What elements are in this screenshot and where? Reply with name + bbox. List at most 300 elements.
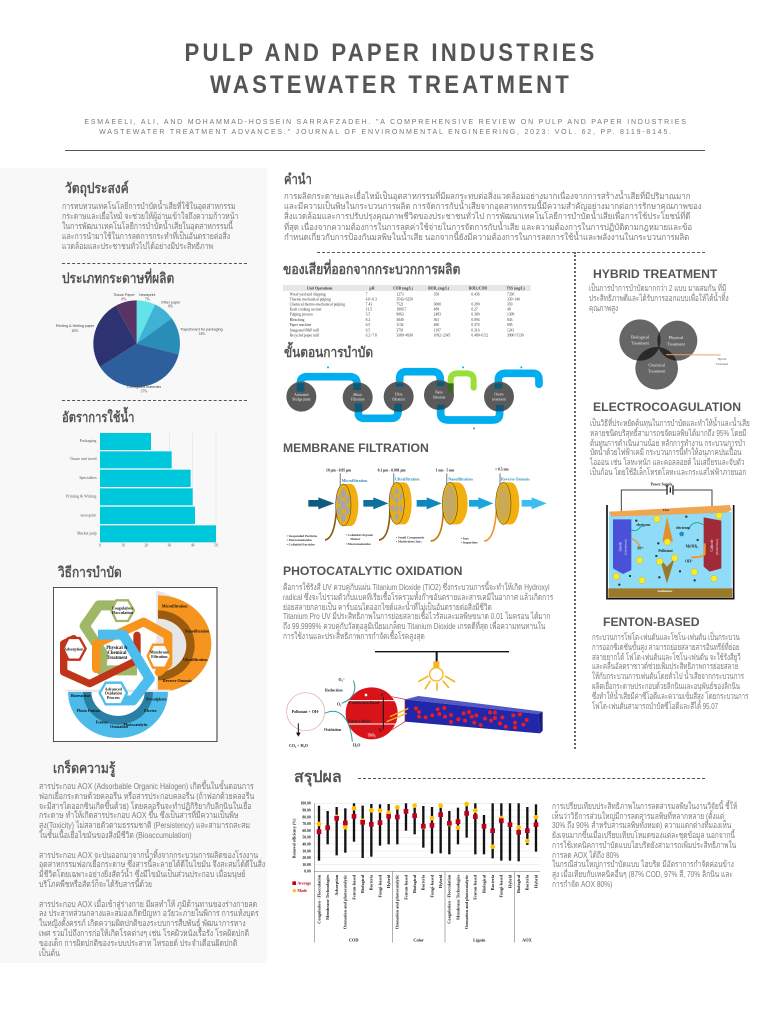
bar chart: water use: 30 bbox=[168, 543, 171, 547]
chart: removal efficiency: Bacteria bbox=[421, 874, 426, 890]
text: introduction: ที่สุด เนื่องจากความต้องการในการลดค่าใช้จ่ายในการจัดการกับน้ำเสีย และความต้องการในการปฏิบัติตามกฎหมายและข้อ bbox=[284, 222, 692, 232]
diagram: membrane filtration: Matter bbox=[350, 537, 361, 541]
table: unit operations: 1309 bbox=[507, 313, 515, 317]
table: unit operations: 350 bbox=[434, 292, 440, 296]
table: unit operations: 7 bbox=[366, 292, 368, 296]
diagram: membrane filtration: • Colloidal Particles bbox=[287, 543, 316, 547]
table: unit operations: 0.480~0.52 bbox=[472, 333, 488, 337]
bar chart: water use: 10 bbox=[121, 543, 125, 547]
venn diagram: hybrid treatment: Treatment bbox=[648, 369, 666, 374]
text: conclusion: ยังเจนมากขึ้นเมื่อเปรียบเทียบโหมดของแต่ละชุดข้อมูล นอกจากนี้ bbox=[552, 830, 735, 840]
chart: removal efficiency: Fungi-based bbox=[429, 874, 434, 898]
diagram: photocatalysis: O₂⁻ bbox=[338, 677, 345, 682]
text: photocatalytic oxidation: Titanium Pro UV มีประสิทธิภาพในการย่อยสลายเชื้อไวรัสและมลพิษขนาด 0.01 ไมครอน ได้มาก bbox=[283, 611, 550, 621]
table: unit operations: 9063 bbox=[397, 313, 404, 317]
text: conclusion: การกำจัด AOX 80%) bbox=[552, 879, 612, 889]
table: unit operations: Chemical thermo-mechanical pulping bbox=[290, 302, 345, 306]
text: AOX facts: กระดาษ ทำให้เกิดสารประกอบ AOX ขึ้น ซึ่งเป็นสารที่มีความเป็นพิษ bbox=[39, 810, 238, 820]
pie chart: paper types: Other paper bbox=[161, 300, 181, 304]
diagram: physical and chemical treatment bbox=[53, 587, 218, 742]
diagram: electrocoagulation cell: M(OH)₃ bbox=[686, 545, 700, 549]
chart: removal efficiency: COD bbox=[349, 938, 358, 943]
diagram: photocatalysis: Conduction Band bbox=[349, 700, 380, 705]
heading: electrocoagulation: ELECTROCOAGULATION bbox=[593, 400, 741, 414]
diagram: electrocoagulation cell: OH⁻ bbox=[686, 560, 693, 564]
chart: removal efficiency: Ozonation and photocatalytic bbox=[343, 875, 348, 929]
text: AOX facts: บริโภคพืชหรือสัตว์ก็จะได้รับสารนี้ด้วย bbox=[39, 879, 152, 889]
text: photocatalytic oxidation: การใช้งานและประสิทธิภาพการกำจัดเชื้อโรคสูงสุด bbox=[283, 631, 425, 641]
heading: objective: วัตถุประสงค์ bbox=[65, 180, 129, 196]
bar chart: water use: Printing & Writing bbox=[66, 493, 96, 498]
text: hybrid treatment: เป็นการบำการบำบัดมากกว่า 2 แบบ มาผสมกัน ที่มี bbox=[589, 283, 726, 293]
text: electrocoagulation: บัดน้ำด้วยไฟฟ้าเคมี กระบวนการนี้ทำให้อนุภาคปนเปื้อน bbox=[590, 447, 742, 457]
flow diagram: treatment steps: Ozone bbox=[495, 393, 504, 397]
diagram: physical and chemical treatment: Persulphate bbox=[146, 696, 167, 701]
bar chart: water use: 40 bbox=[191, 543, 195, 547]
table: unit operations: 3380~4930 bbox=[397, 333, 413, 337]
text: AOX facts: มีชีวิตโดยเฉพาะอย่างยิ่งสัตว์น้ำ ซึ่งมีไขมันเป็นส่วนประกอบ เมื่อมนุษย์ bbox=[39, 869, 245, 879]
diagram: physical and chemical treatment: Physical & bbox=[106, 646, 128, 651]
text: fenton-based: ให้กับกระบวนการเฟนตันโดยทั่วไป น้ำเสียจากกระบวนการ bbox=[592, 671, 744, 681]
chart: removal efficiency: Hybrid bbox=[507, 874, 512, 888]
chart: removal efficiency: Coagulation - Flocculation bbox=[447, 874, 452, 924]
chart: removal efficiency: Biological bbox=[516, 874, 521, 893]
diagram: membrane filtration: • Small Compounds bbox=[396, 535, 425, 539]
chart: removal efficiency: 10.00 bbox=[302, 863, 311, 867]
diagram: physical and chemical treatment: Coagulation bbox=[112, 605, 134, 610]
diagram: photocatalysis bbox=[286, 651, 543, 748]
text: AOX facts bbox=[39, 780, 265, 958]
table: unit operations: 2483 bbox=[434, 313, 441, 317]
chart: removal efficiency: Coagulation - Flocculation bbox=[316, 874, 321, 924]
diagram: membrane filtration: Reverse Osmosis bbox=[501, 476, 530, 481]
diagram: physical and chemical treatment: Bioreaction bbox=[71, 693, 91, 698]
text: electrocoagulation: เป็นวิธีที่ประหยัดต้นทุนในการบำบัดและทำให้น้ำและน้ำเสีย bbox=[590, 418, 750, 428]
flow diagram: treatment steps bbox=[286, 366, 543, 430]
citation: ESMAEELI, ALI, AND MOHAMMAD-HOSSEIN SARRAFZADEH. "A COMPREHENSIVE REVIEW ON PULP AND PAPER INDUSTRIES bbox=[84, 119, 688, 126]
table: unit operations: pH bbox=[370, 286, 375, 290]
vertical divider bbox=[574, 252, 576, 749]
table: unit operations: 7330 bbox=[507, 292, 515, 296]
diagram: physical and chemical treatment: Electro bbox=[144, 708, 156, 713]
chart: removal efficiency: Fenton-based bbox=[403, 874, 408, 900]
text: fenton-based: กระบวนการโฟโต-เฟนตันและโซโน-เฟนตัน เป็นกระบวน bbox=[592, 632, 740, 642]
pie chart: paper types: Corrugated materials bbox=[127, 385, 161, 389]
bar chart: water use: Specialties bbox=[79, 475, 97, 480]
table: unit operations: Recycled paper mill bbox=[290, 333, 319, 337]
chart: removal efficiency: Bacteria bbox=[490, 874, 495, 890]
table: unit operations: Pulping process bbox=[290, 313, 314, 317]
table: unit operations: 361 bbox=[434, 318, 440, 322]
table: unit operations: Wood yard and chipping bbox=[290, 292, 326, 296]
text: fenton-based: การออกซิเดชันขั้นสูง สามารถย่อยสลายสารอินทรีย์ที่ย่อย bbox=[592, 642, 739, 652]
chart: removal efficiency: 20.00 bbox=[302, 856, 311, 860]
table: unit operations: 1273 bbox=[397, 292, 404, 296]
diagram: electrocoagulation cell: Pollutant bbox=[659, 549, 674, 553]
diagram: physical and chemical treatment: Treatment bbox=[107, 656, 128, 661]
text: fenton-based: และคลื่นอัลตราซาวด์ช่วยเพิ่มประสิทธิภาพการย่อยสลาย bbox=[592, 661, 738, 671]
diagram: electrocoagulation cell: Floc bbox=[663, 508, 670, 512]
chart: removal efficiency: Ozonation and photocatalytic bbox=[464, 875, 469, 929]
chart: removal efficiency: AOX bbox=[522, 938, 533, 943]
diagram: physical and chemical treatment: Filtration bbox=[151, 654, 168, 659]
diagram: photocatalysis: e⁻ bbox=[381, 693, 386, 698]
text: AOX facts: เป็นต้น bbox=[39, 948, 60, 958]
chart: removal efficiency: 0.00 bbox=[304, 870, 311, 874]
text: AOX facts: ลง ประสาทส่วนกลางและสมองเกิดปัญหา อวัยวะภายในพิการ การแท้งบุตร bbox=[39, 908, 259, 918]
text: AOX facts: สารประกอบ AOX (Adsorbable Organic Halogen) เกิดขึ้นในขั้นตอนการ bbox=[39, 781, 254, 791]
table: unit operations bbox=[283, 285, 530, 338]
diagram: physical and chemical treatment: Microfiltration bbox=[162, 603, 188, 608]
table: unit operations: 0.094 bbox=[472, 318, 480, 322]
chart: removal efficiency: Removal efficiency (%) bbox=[291, 818, 296, 858]
text: AOX facts: สารประกอบ AOX จะปนออกมาจากน้ำทิ้งจากกระบวนการผลิตของโรงงาน bbox=[39, 850, 258, 860]
diagram: electrocoagulation cell bbox=[606, 482, 734, 600]
text: introduction: และมีความเป็นพิษในกระบวนการผลิต การจัดการกับน้ำเสียจากอุตสาหกรรมนี้มีความสำคัญอย่างมากต่อการรักษาคุณภาพของ bbox=[284, 201, 702, 211]
text: conclusion: เห็นว่าวิธีการส่วนใหญ่มีการลดสารมลพิษที่หลากหลาย (ตั้งแต่ bbox=[552, 811, 724, 821]
chart: removal efficiency: Hybrid bbox=[438, 874, 443, 888]
venn diagram: hybrid treatment: Biological bbox=[631, 334, 650, 339]
text: objective: การทบทวนเทคโนโลยีการบำบัดน้ำเสียที่ใช้ในอุตสาหกรรม bbox=[62, 201, 235, 211]
diagram: electrocoagulation cell: electrons bbox=[676, 526, 691, 530]
table: unit operations: 330~140 bbox=[507, 297, 520, 301]
diagram: membrane filtration: • Suspended Particles bbox=[287, 534, 318, 538]
chart: removal efficiency: Hybrid bbox=[533, 874, 538, 888]
table: unit operations: - bbox=[472, 297, 474, 301]
diagram: physical and chemical treatment: Ultrafiltration bbox=[183, 657, 208, 662]
table: unit operations: 6.5 bbox=[366, 323, 371, 327]
diagram: membrane filtration: Microfiltration bbox=[342, 478, 368, 483]
diagram: photocatalysis: H₂O bbox=[353, 743, 360, 748]
citation: WASTEWATER TREATMENT ADVANCES." JOURNAL OF ENVIRONMENTAL ENGINEERING, 2023: VOL. 62, PP. 8119-8145. bbox=[99, 129, 673, 136]
chart: removal efficiency: 50.00 bbox=[302, 836, 311, 840]
heading: water use: อัตราการใช้น้ำ bbox=[62, 409, 134, 425]
bar chart: water use: Packaging bbox=[80, 438, 96, 443]
diagram: membrane filtration: • Ions bbox=[461, 536, 469, 540]
venn diagram: hybrid treatment: Treatment bbox=[631, 341, 650, 346]
table: unit operations: 1197 bbox=[434, 328, 441, 332]
diagram: electrocoagulation cell: Power Supply bbox=[651, 482, 673, 486]
text: introduction: กำหนดเกี่ยวกับการป้องกันมลพิษในน้ำเสีย นอกจากนี้ยังมีความต้องการในการลดการใช้น้ำและพลังงานในกระบวนการผลิต bbox=[284, 232, 689, 242]
table: unit operations: 4.0~6.3 bbox=[366, 297, 377, 301]
diagram: electrocoagulation cell: electrons bbox=[637, 523, 651, 527]
diagram: electrocoagulation cell: Sediments bbox=[658, 589, 673, 593]
diagram: membrane filtration: < 0.5 nm bbox=[495, 468, 509, 472]
text: photocatalytic oxidation: คือการใช้รังสี UV ควบคู่กับแผ่น Titanium Dioxide (TiO2) ซึ่งกระบวนการนี้จะทำให้เกิด Hydroxyl bbox=[283, 582, 550, 592]
diagram: membrane filtration: 10 μm - 0.05 μm bbox=[326, 469, 351, 473]
heading: fenton-based: FENTON-BASED bbox=[603, 615, 700, 629]
text: electrocoagulation: หลายชนิดบริสุทธิ์สามารถขจัดมลพิษได้มากถึง 95% โดยมี bbox=[590, 428, 746, 438]
bar chart: water use: 20 bbox=[145, 543, 148, 547]
chart: removal efficiency: Biological bbox=[481, 874, 486, 893]
pie chart: paper types: 8% bbox=[122, 297, 126, 301]
text: AOX facts: จะมีสารไดออกซินเกิดขึ้นด้วย) โดยคลอรีนจะทำปฏิกิริยากับลิกนินในเยื่อ bbox=[39, 801, 251, 811]
diagram: physical and chemical treatment: Photo Fenton bbox=[77, 708, 101, 713]
text: hybrid treatment: ประสิทธิภาพดีและได้รับการออกแบบเพื่อให้ได้น้ำทิ้ง bbox=[589, 293, 729, 303]
table: unit operations: 3543~6250 bbox=[397, 297, 413, 301]
heading: process waste: ของเสียที่ออกจากกระบวกการผลิต bbox=[283, 261, 460, 277]
text: fenton-based: โฟโต-เฟนตันสามารถบำบัดซีโอดีและสีได้ 95.07 bbox=[592, 701, 718, 711]
flow diagram: treatment steps: filtration bbox=[433, 395, 446, 399]
chart: removal efficiency: Fenton-based bbox=[473, 874, 478, 900]
text: fenton-based: ผลิตเยื่อกระดาษประกอบด้วยลิกนินและอนุพันธ์ของลิกนิน bbox=[592, 681, 740, 691]
text: AOX facts: อุตสาหกรรมฟอกเยื่อกระดาษ ซึ่งสารนี้ละลายได้ดีในไขมัน จึงสะสมได้ดีในสิ่ง bbox=[39, 859, 265, 869]
diagram: physical and chemical treatment: Flocculation bbox=[112, 610, 134, 615]
venn diagram: hybrid treatment: Hybrid bbox=[718, 357, 727, 361]
table: unit operations: 0.309 bbox=[472, 313, 480, 317]
flow diagram: treatment steps: Nano bbox=[435, 391, 443, 395]
table: unit operations: 8.2 bbox=[366, 318, 371, 322]
title: PULP AND PAPER INDUSTRIES bbox=[185, 39, 597, 67]
diagram: photocatalysis: TiO₂ bbox=[368, 733, 376, 738]
chart: removal efficiency: 70.00 bbox=[302, 822, 311, 826]
text: conclusion: การใช้เทคนิคการบำบัดแบบไฮบริดยังสามารถเพิ่มประสิทธิภาพใน bbox=[552, 840, 736, 850]
heading: treatment methods: วิธีการบำบัด bbox=[58, 564, 122, 580]
title bbox=[185, 39, 597, 99]
diagram: photocatalysis: CO₂ + H₂O bbox=[289, 743, 308, 748]
pie chart: paper types: 7% bbox=[145, 297, 150, 301]
text: fenton-based: สลายยากได้ โฟโต-เฟนตันและโซโน-เฟนตัน จะใช้รังสียูวี bbox=[592, 652, 741, 662]
diagram: photocatalysis: Reduction bbox=[325, 688, 343, 693]
table: unit operations: 3.5 bbox=[366, 313, 371, 317]
table: unit operations: 48 bbox=[507, 308, 511, 312]
table: unit operations: 0.316 bbox=[472, 328, 480, 332]
text: AOX facts: ฟอกเยื่อกระดาษด้วยคลอรีน หรือสารประกอบคลอรีน (ถ้าฟอกด้วยคลอรีน bbox=[39, 791, 254, 801]
table: unit operations: 1241 bbox=[507, 328, 515, 332]
title: WASTEWATER TREATMENT bbox=[210, 71, 572, 99]
diagram: membrane filtration: • Macromolecules bbox=[346, 542, 372, 546]
pie chart: paper types: 26% bbox=[72, 329, 78, 333]
chart: removal efficiency: Fungi-based bbox=[499, 874, 504, 898]
diagram: physical and chemical treatment: Adsorption bbox=[64, 646, 84, 651]
diagram: electrocoagulation cell: (Oxidation) bbox=[624, 539, 628, 555]
table: unit operations: Paper machine bbox=[290, 323, 312, 327]
diagram: membrane filtration: Nanofiltration bbox=[448, 477, 474, 482]
diagram: membrane filtration: • Macromolecules bbox=[287, 538, 313, 542]
pie chart: paper types: Printing & Writing paper bbox=[56, 324, 95, 328]
chart: removal efficiency: 100.00 bbox=[301, 802, 311, 806]
text: conclusion: การลด AOX ได้ถึง 80% bbox=[552, 850, 619, 860]
table: unit operations: Integrated P&P mill bbox=[290, 328, 319, 332]
table: unit operations: 843 bbox=[507, 318, 513, 322]
heading: introduction: คำนำ bbox=[284, 171, 312, 187]
chart: removal efficiency: Fenton-based bbox=[351, 874, 356, 900]
chart: removal efficiency: 30.00 bbox=[302, 849, 311, 853]
diagram: electrocoagulation cell: M³⁺ bbox=[638, 546, 644, 550]
table: unit operations: 7521 bbox=[397, 302, 404, 306]
diagram: membrane filtration: Ultrafiltration bbox=[395, 477, 420, 482]
pie chart: paper types: Paperboard for packaging bbox=[181, 327, 223, 331]
heading: hybrid treatment: HYBRID TREATMENT bbox=[593, 267, 717, 281]
table: unit operations: 489 bbox=[434, 308, 440, 312]
chart: removal efficiency: 40.00 bbox=[302, 842, 311, 846]
pie chart: paper types: 8% bbox=[168, 304, 173, 308]
table: unit operations: 6.2~7.8 bbox=[366, 333, 377, 337]
text: objective bbox=[62, 200, 238, 251]
diagram: physical and chemical treatment: Fenton bbox=[96, 719, 108, 724]
text: conclusion: สูง เมื่อเทียบกับเทคนิคอื่นๆ (87% COD, 97% สี, 70% ลิกนิน และ bbox=[552, 869, 733, 879]
diagram: membrane filtration: 0.1 μm - 0.001 μm bbox=[378, 469, 406, 473]
text: hybrid treatment bbox=[589, 282, 729, 314]
table: unit operations: 3000 bbox=[434, 302, 441, 306]
panel: left column background bbox=[0, 168, 267, 963]
diagram: electrocoagulation cell: Anode bbox=[619, 542, 623, 552]
heading: trivia: เกร็ดความรู้ bbox=[53, 760, 115, 776]
diagram: physical and chemical treatment: Membrane bbox=[150, 649, 169, 654]
table: unit operations: - bbox=[434, 297, 436, 301]
pie chart: paper types: Tissue Paper bbox=[113, 293, 135, 297]
diagram: membrane filtration: • Colloidal Organic bbox=[346, 533, 374, 537]
table: unit operations: 695 bbox=[507, 323, 513, 327]
bar chart: water use: 0 bbox=[99, 543, 101, 547]
table: unit operations: 1134 bbox=[397, 323, 404, 327]
pie chart: paper types: 37% bbox=[141, 389, 147, 393]
chart: removal efficiency: Fungi-based bbox=[377, 874, 382, 898]
bar chart: water use: 50 bbox=[214, 543, 218, 547]
text: objective: ในการพัฒนาเทคโนโลยีการบำบัดน้ำเสียในอุตสาหกรรมนี้ bbox=[62, 221, 233, 231]
heading: treatment steps: ขั้นตอนการบำบัด bbox=[284, 344, 373, 360]
chart: removal efficiency: Bacteria bbox=[369, 874, 374, 890]
flow diagram: treatment steps: Micro bbox=[354, 393, 363, 397]
chart: removal efficiency: Color bbox=[413, 938, 424, 943]
text: electrocoagulation: ไอออน เช่น โลหะหนัก และคอลลอยด์ ไม่เสถียรและจับตัว bbox=[590, 457, 744, 467]
text: objective: แวดล้อมและประชาชนทั่วไปได้อย่างมีประสิทธิภาพ bbox=[62, 241, 213, 251]
table: unit operations: BOD₅ (mg/L) bbox=[429, 286, 450, 290]
text: photocatalytic oxidation: radical ซึ่งจะไปรวมตัวกับแบคทีเรียเชื้อโรครวมทั้งก๊าซอันตรายและสารเคมีในอากาศ แล้วเกิดการ bbox=[283, 592, 553, 602]
text: photocatalytic oxidation: ถึง 99.9999% ควบคู่กับวัสดุอลูมิเนียมเกล็ดบ Titanium Dioxide เกรดดีที่สุด เพื่อความทนทานใน bbox=[283, 621, 545, 631]
text: AOX facts: เพศ รวมไปถึงการก่อให้เกิดโรคต่างๆ เช่น โรคผิวหนังเรื้อรัง โรคผิดปกติ bbox=[39, 928, 249, 938]
flow diagram: treatment steps: Ultra bbox=[395, 393, 403, 397]
chart: removal efficiency: Average bbox=[297, 881, 311, 886]
text: objective: และการนำมาใช้ในการลดการกระทำที่เป็นอันตรายต่อสิ่ง bbox=[62, 231, 230, 241]
heading: photocatalytic oxidation: PHOTOCATALYTIC OXIDATION bbox=[283, 564, 462, 578]
diagram: membrane filtration: • Impurities bbox=[461, 541, 478, 545]
diagram: physical and chemical treatment: Advanced bbox=[105, 686, 123, 691]
diagram: membrane filtration: 1 nm - 5 nm bbox=[436, 469, 454, 473]
chart: removal efficiency: 80.00 bbox=[302, 815, 311, 819]
table: unit operations: 0.399 bbox=[472, 302, 480, 306]
pie chart: paper types bbox=[56, 293, 223, 393]
text: electrocoagulation: ต้นทุนการดำเนินงานน้อย หลักการทำงาน กระบวนการบำ bbox=[590, 438, 746, 448]
chart: removal efficiency: Membrane Technologies bbox=[325, 874, 330, 920]
text: AOX facts: ในชั้นเนื้อเยื่อไขมันของสิ่งมีชีวิต (Bioaccumulation) bbox=[39, 830, 192, 840]
table: unit operations: COD (mg/L) bbox=[393, 286, 414, 290]
flow diagram: treatment steps: Activated bbox=[295, 393, 309, 397]
venn diagram: hybrid treatment bbox=[619, 319, 728, 390]
table: unit operations: TSS (mg/L) bbox=[507, 286, 526, 290]
table: unit operations: 1092~2345 bbox=[434, 333, 451, 337]
text: fenton-based bbox=[592, 632, 748, 711]
diagram: physical and chemical treatment: Oxidation bbox=[105, 690, 123, 695]
table: unit operations: 13.5 bbox=[366, 308, 373, 312]
flow diagram: treatment steps: treatment bbox=[492, 397, 506, 401]
citation bbox=[84, 119, 688, 136]
heading: conclusion: สรุปผล bbox=[294, 769, 342, 786]
pie chart: paper types: Newsprint bbox=[139, 293, 155, 297]
diagram: photocatalysis: Pollutant + OH· bbox=[292, 709, 319, 714]
text: electrocoagulation: เป็นก้อน โดยใช้อิเล็กโทรดโลหะและกระแสไฟฟ้าภายนอก bbox=[590, 467, 746, 477]
text: hybrid treatment: คุณภาพสูง bbox=[589, 303, 618, 313]
text: photocatalytic oxidation: ย่อยสลายกลายเป็น คาร์บอนไดออกไซด์และน้ำที่ไม่เป็นอันตรายต่อสิ่งมีชีวิต bbox=[283, 602, 492, 612]
table: unit operations: 7.43 bbox=[366, 302, 373, 306]
venn diagram: hybrid treatment: Treatment bbox=[667, 342, 686, 347]
table: unit operations: Kraft cooking section bbox=[290, 308, 322, 312]
diagram: electrocoagulation cell: Cathode bbox=[710, 539, 714, 552]
chart: removal efficiency: Biological bbox=[360, 874, 365, 893]
diagram: physical and chemical treatment: Reverse Osmosis bbox=[163, 678, 192, 683]
diagram: photocatalysis: O₂ bbox=[337, 702, 342, 707]
table: unit operations: 3040 bbox=[397, 318, 404, 322]
text: photocatalytic oxidation bbox=[283, 581, 553, 642]
text: conclusion: ในกรณีส่วนใหญ่การบำบัดแบบ ไฮบริด มีอัตราการกำจัดค่อนข้าง bbox=[552, 859, 734, 869]
diagram: membrane filtration: • Multivalent Ions bbox=[396, 540, 422, 544]
text: electrocoagulation bbox=[590, 417, 750, 477]
chart: removal efficiency: Lignin bbox=[473, 938, 486, 943]
table: unit operations: 1809.7 bbox=[397, 308, 407, 312]
pie chart: paper types: 14% bbox=[198, 332, 205, 336]
diagram: physical and chemical treatment: Process bbox=[107, 695, 120, 700]
chart: removal efficiency: 60.00 bbox=[302, 829, 311, 833]
text: conclusion: 30% ถึง 90% สำหรับสารมลพิษทั้งหมด) ความแตกต่างที่มองเห็น bbox=[552, 820, 731, 830]
chart: removal efficiency: Biological bbox=[412, 874, 417, 893]
bar chart: water use bbox=[66, 432, 218, 547]
diagram: photocatalysis: Valence Band bbox=[347, 719, 371, 724]
text: introduction bbox=[284, 190, 702, 242]
flow diagram: treatment steps: Sludge plant bbox=[292, 398, 311, 402]
table: unit operations: 350 bbox=[507, 302, 513, 306]
text: AOX facts: สารประกอบ AOX เมื่อเข้าสู่ร่างกาย มีผลทำให้ ภูมิต้านทานของร่างกายลด bbox=[39, 899, 257, 909]
text: fenton-based: ซึ่งทำให้น้ำเสียมีค่าซีโอดีและความเข้มสีสูง โดยกระบวนการ bbox=[592, 691, 748, 701]
flow diagram: treatment steps: Filtration bbox=[351, 398, 365, 402]
venn diagram: hybrid treatment: Treatment bbox=[716, 362, 728, 366]
text: AOX facts: ของเด็ก การผิดปกติของระบบประสาท ไทรอยด์ ประจำเดือนผิดปกติ bbox=[39, 938, 237, 948]
bar chart: water use: Tissue and towel bbox=[70, 456, 98, 461]
chart: removal efficiency bbox=[291, 802, 540, 943]
table: unit operations: BOD₅/COD bbox=[469, 286, 488, 290]
diagram: membrane filtration bbox=[286, 468, 546, 547]
heading: paper types: ประเภทกระดาษที่ผลิต bbox=[62, 270, 174, 286]
diagram: physical and chemical treatment: Ozonation bbox=[110, 724, 129, 729]
table: unit operations: Thermo mechanical pulping bbox=[290, 297, 331, 301]
diagram: electrocoagulation cell: (Reduction) bbox=[715, 539, 719, 555]
table: unit operations: Unit Operations bbox=[307, 286, 333, 290]
text: introduction: สิ่งแวดล้อมและการปรับปรุงคุณภาพชีวิตของประชาชนทั่วไป การพัฒนาเทคโนโลยีการบำบัดน้ำเสียเพื่อการใช้ประโยชน์ที่ดี bbox=[284, 211, 690, 221]
heading: membrane filtration: MEMBRANE FILTRATION bbox=[283, 441, 429, 455]
diagram: physical and chemical treatment: Photocatalytic bbox=[123, 722, 148, 727]
flow diagram: treatment steps: filtration bbox=[393, 397, 406, 401]
chart: removal efficiency: Adsorption bbox=[334, 874, 339, 896]
table: unit operations: 0.374 bbox=[472, 323, 480, 327]
venn diagram: hybrid treatment: Physical bbox=[669, 335, 684, 340]
table: unit operations: 460 bbox=[434, 323, 440, 327]
text: AOX facts: ในหญิงตั้งครรภ์ เกิดความผิดปกติของระบบการสืบพันธุ์ พัฒนาการทาง bbox=[39, 918, 246, 928]
bar chart: water use: Market pulp bbox=[77, 530, 97, 535]
chart: removal efficiency: 90.00 bbox=[302, 808, 311, 812]
venn diagram: hybrid treatment: Chemical bbox=[648, 362, 666, 367]
chart: removal efficiency: Membrane Technologies bbox=[455, 874, 460, 920]
text: introduction: การผลิตกระดาษและเยื่อไหม้เป็นอุตสาหกรรมที่มีผลกระทบต่อสิ่งแวดล้อมอย่างมากเนื่องจากการสร้างน้ำเสียที่มีปริมาณมาก bbox=[284, 191, 690, 201]
table: unit operations: 3791 bbox=[397, 328, 404, 332]
text: conclusion: การเปรียบเทียบประสิทธิภาพในการลดสารมลพิษในงานวิจัยนี้ ชี้ให้ bbox=[552, 801, 737, 811]
text: objective: กระดาษและเยื่อไหม้ จะช่วยให้ผู้อ่านเข้าใจถึงความก้าวหน้า bbox=[62, 211, 238, 221]
chart: removal efficiency: Hybrid bbox=[386, 874, 391, 888]
diagram: physical and chemical treatment: Chemical bbox=[108, 651, 127, 656]
chart: removal efficiency: Bacteria bbox=[525, 874, 530, 890]
text: AOX facts: สูง(Toxicity) ไม่สลายตัวตามธรรมชาติ (Persistency) และสามารถสะสม bbox=[39, 820, 250, 830]
diagram: photocatalysis: Oxidation bbox=[324, 727, 342, 732]
table: unit operations: 0.27 bbox=[472, 308, 478, 312]
table: unit operations: 3900~5130 bbox=[507, 333, 524, 337]
